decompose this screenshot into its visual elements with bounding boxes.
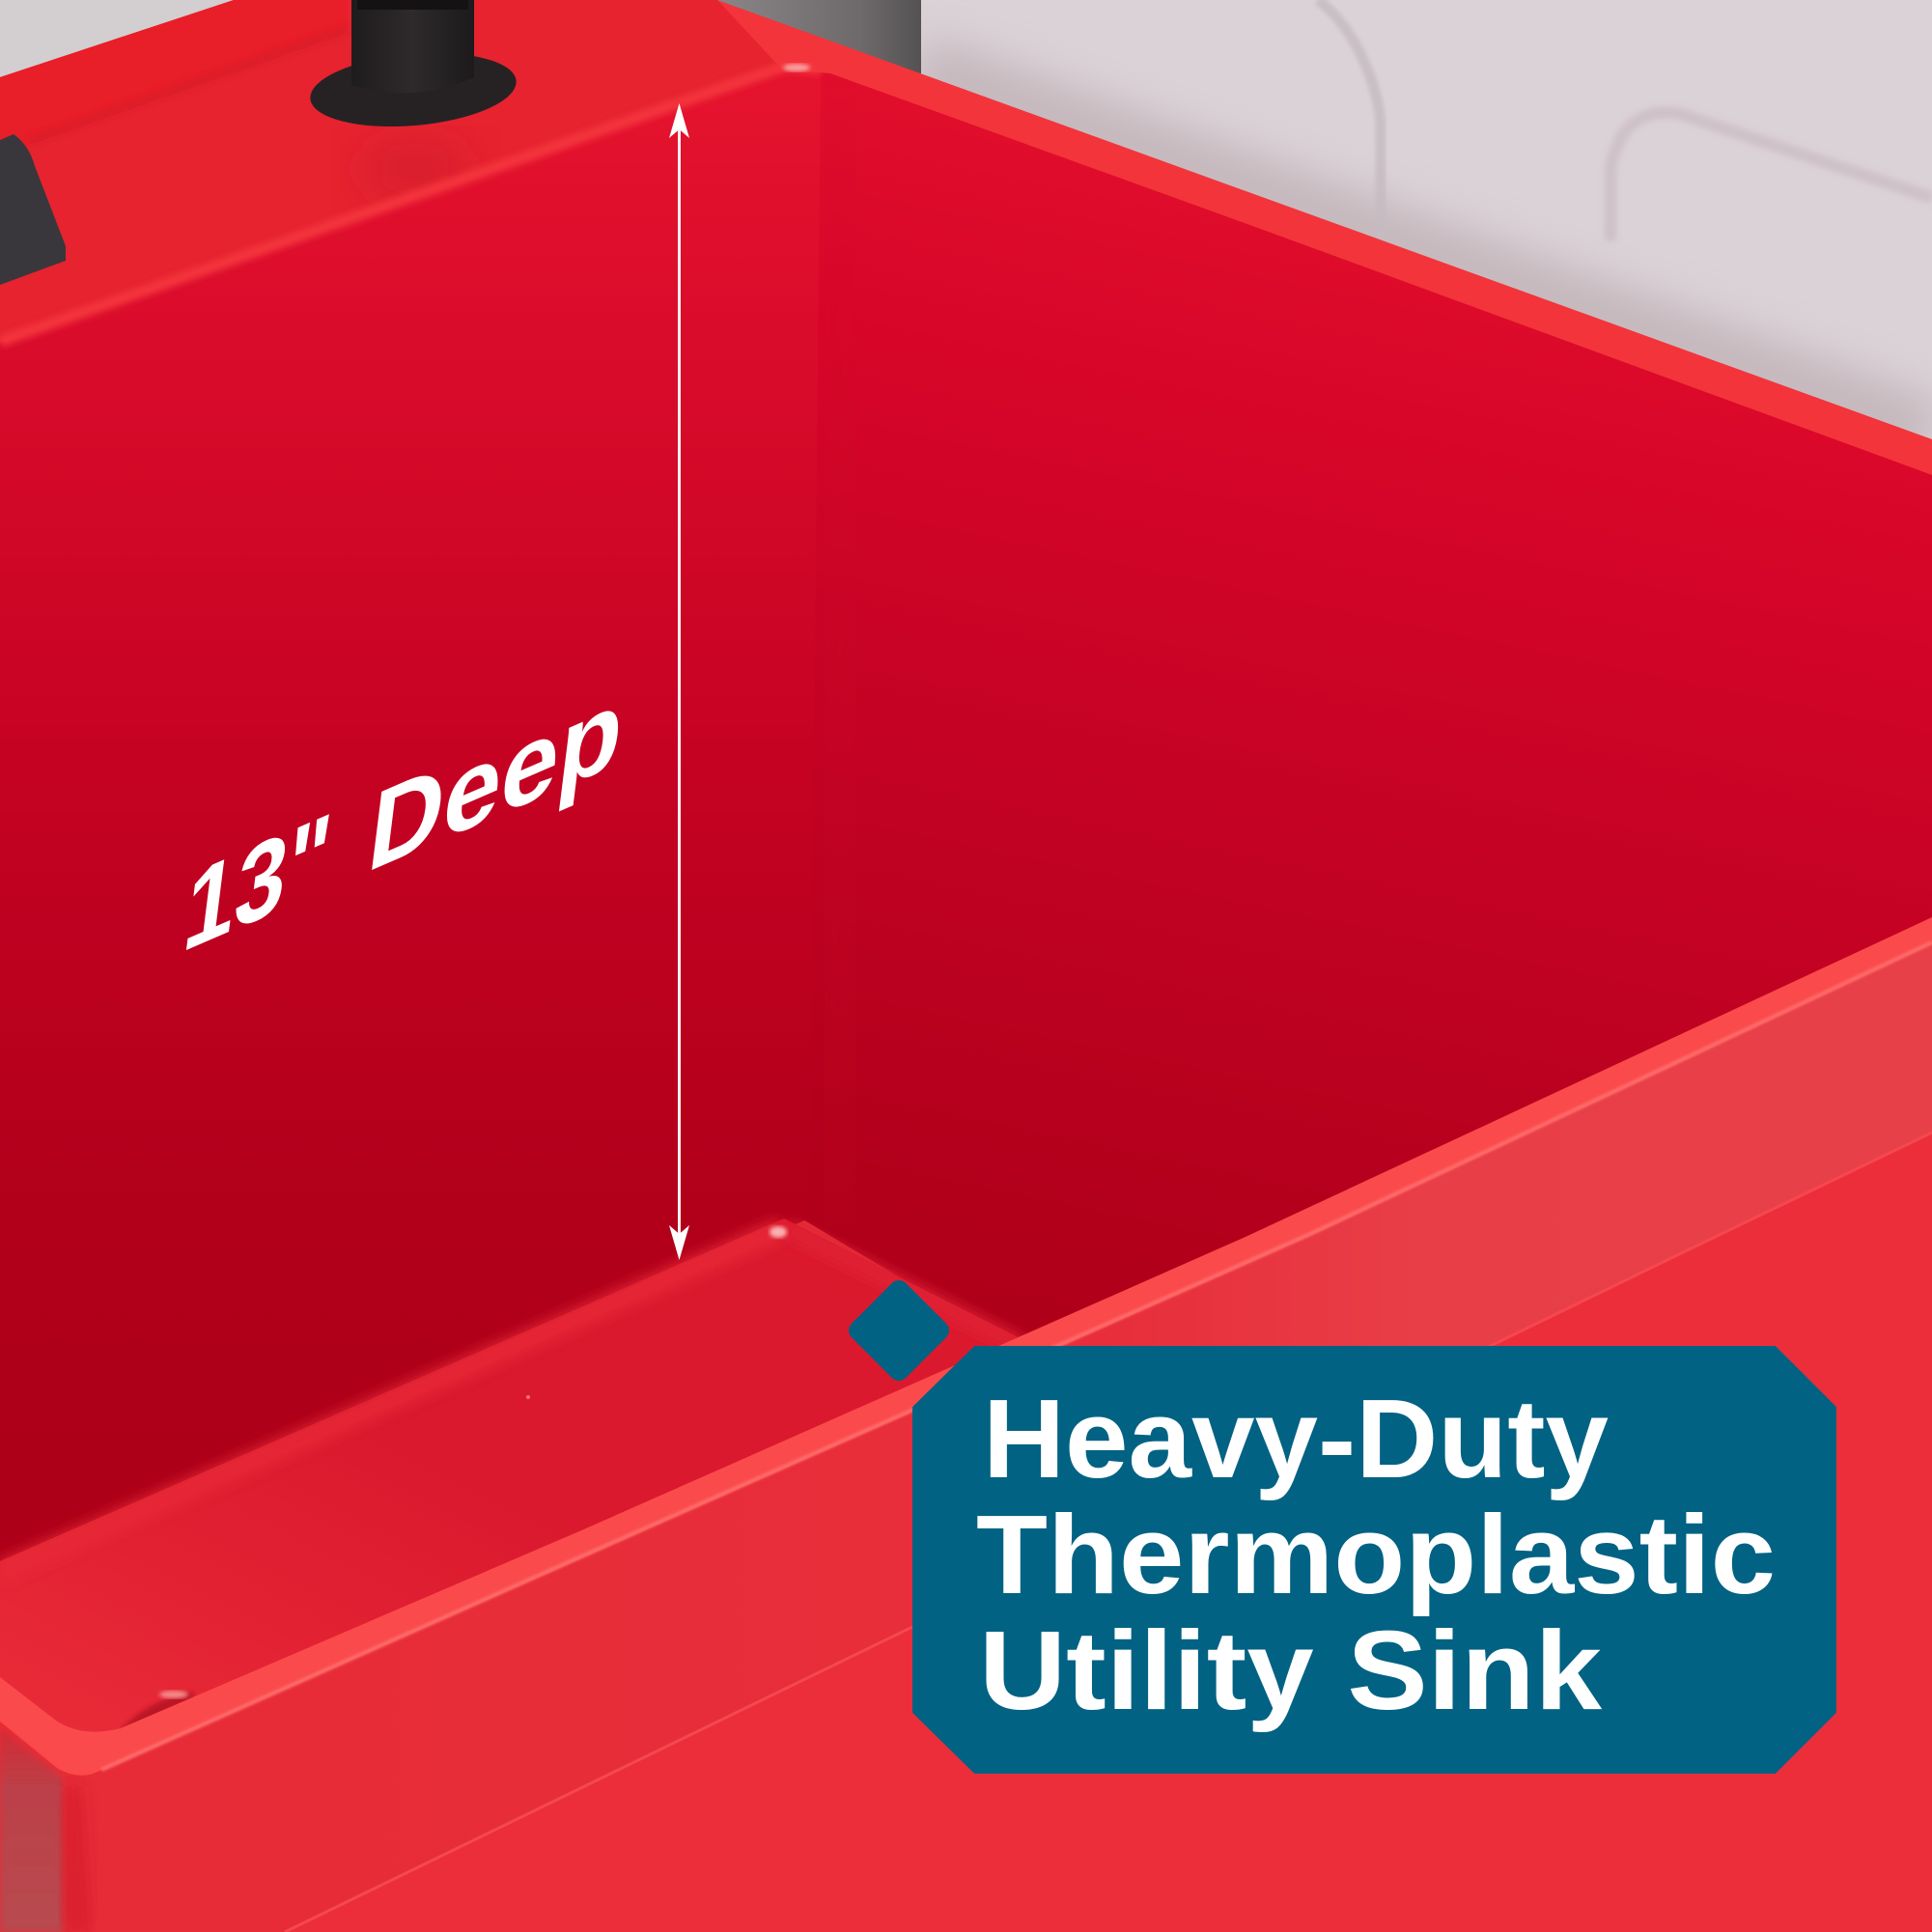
drain hole <box>121 1691 194 1730</box>
callout text: Heavy-Duty <box>983 1376 1609 1501</box>
faucet <box>307 0 519 134</box>
back wall of basin <box>801 53 1932 1352</box>
depth label <box>178 661 630 977</box>
front rim of basin <box>0 917 1932 1776</box>
callout text <box>976 1376 1776 1733</box>
rear rim of basin <box>717 0 1932 475</box>
shaded inner corner <box>830 87 850 1226</box>
rim glint <box>783 64 810 71</box>
left wall of basin <box>0 60 821 1566</box>
depth label: Deep <box>362 661 630 898</box>
depth measurement arrow <box>669 103 689 1260</box>
callout marker diamond <box>858 1290 939 1371</box>
left rim highlight <box>0 66 821 342</box>
sink front face <box>0 941 1932 1932</box>
basin floor <box>0 1218 1027 1738</box>
left corner shadow <box>0 1728 92 1932</box>
depth label: 13" <box>178 788 338 977</box>
upper left wall <box>0 0 251 87</box>
faucet handle <box>0 134 66 285</box>
callout text: Thermoplastic <box>976 1492 1776 1617</box>
callout: product name <box>914 1348 1834 1772</box>
sink deck <box>0 0 850 352</box>
background wall panels <box>676 0 1932 502</box>
callout text: Utility Sink <box>979 1608 1603 1733</box>
